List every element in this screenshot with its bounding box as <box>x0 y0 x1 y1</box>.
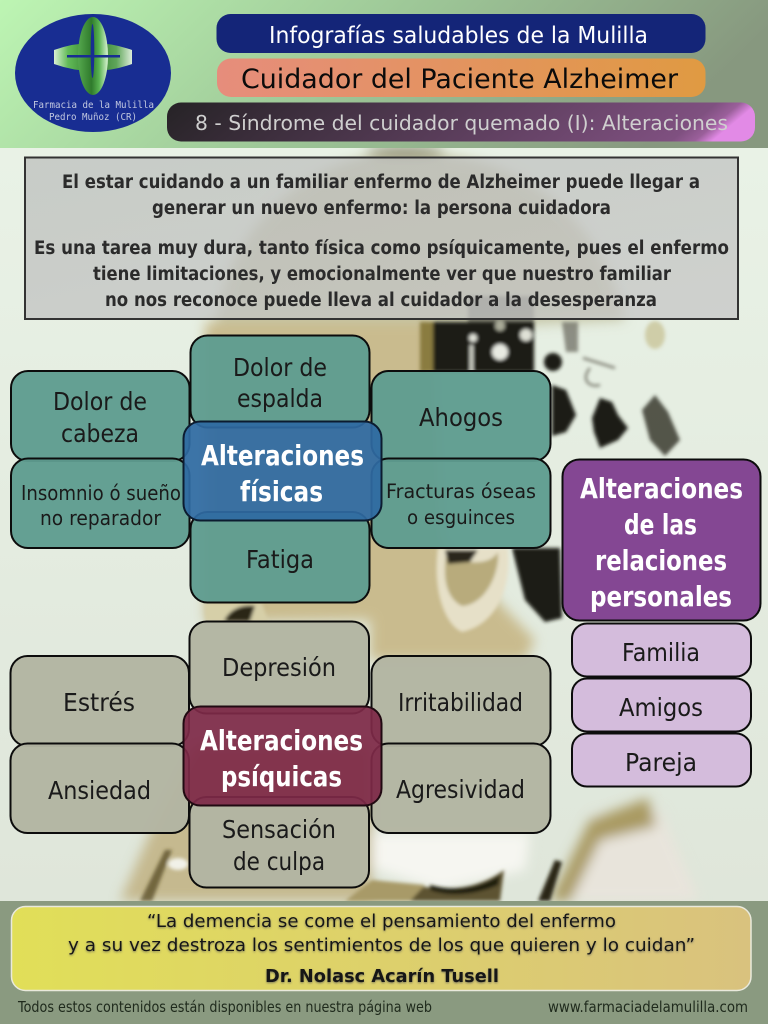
logo cross: green rings <box>54 17 132 95</box>
box: ansiedad <box>10 744 189 833</box>
center: alteraciones físicas: Alteraciones <box>201 439 364 472</box>
logo caption: Farmacia de la Mulilla <box>33 100 154 111</box>
header band <box>0 0 768 148</box>
box: dolor de espalda: Dolor de <box>233 353 327 382</box>
ear <box>437 548 509 632</box>
intro text panel: no nos reconoce puede lleva al cuidador a la desesperanza <box>105 290 657 311</box>
box: sensación de culpa <box>190 797 369 888</box>
box: irritabilidad: Irritabilidad <box>398 688 523 717</box>
top of skull <box>365 148 445 156</box>
intro text panel: tiene limitaciones, y emocionalmente ver que nuestro familiar <box>93 264 672 285</box>
hair <box>205 322 535 660</box>
header pill: series title <box>216 14 706 53</box>
box: insomnio <box>11 458 190 548</box>
box: dolor de espalda <box>190 336 370 428</box>
box: agresividad: Agresividad <box>396 775 525 804</box>
heading: relaciones personales: personales <box>590 580 732 613</box>
pale body right <box>570 810 700 901</box>
heading: relaciones personales: de las <box>624 508 697 541</box>
box: pareja <box>572 734 751 786</box>
center: alteraciones psíquicas: psíquicas <box>221 760 342 793</box>
box: insomnio: Insomnio ó sueño <box>21 481 181 505</box>
intro text panel: El estar cuidando a un familiar enfermo de Alzheimer puede llegar a <box>62 172 700 193</box>
center: alteraciones psíquicas <box>184 706 382 806</box>
dark hair and puzzle <box>432 322 534 372</box>
footer note: Todos estos contenidos están disponibles en nuestra página web <box>17 998 432 1016</box>
cluster: alteraciones físicas <box>11 336 550 602</box>
box: fatiga: Fatiga <box>246 545 314 574</box>
header pill: main title: Cuidador del Paciente Alzheimer <box>241 64 679 95</box>
box: fracturas: o esguinces <box>407 506 515 529</box>
box: dolor de cabeza: cabeza <box>61 419 139 448</box>
box: fatiga <box>190 512 370 602</box>
heading: relaciones personales: relaciones <box>595 544 727 577</box>
quote panel: y a su vez destroza los sentimientos de los que quieren y lo cuidan” <box>68 935 695 956</box>
bottom dark strokes <box>400 870 504 901</box>
left hair falling <box>120 745 372 901</box>
left neck mark <box>205 603 268 621</box>
collar <box>372 833 530 890</box>
intro text panel: generar un nuevo enfermo: la persona cuidadora <box>152 198 611 219</box>
center: alteraciones psíquicas: Alteraciones <box>200 724 363 757</box>
box: ahogos <box>372 371 550 461</box>
box: fracturas <box>372 458 550 548</box>
box: sensación de culpa: Sensación <box>222 815 336 844</box>
box: dolor de cabeza <box>11 371 190 461</box>
box: estrés <box>10 656 189 746</box>
black hair near ear <box>512 548 562 622</box>
box: agresividad <box>372 744 550 833</box>
box: depresión <box>190 622 369 714</box>
quote panel <box>12 906 751 990</box>
header pill: series title: Infografías saludables de la Mulilla <box>269 23 648 49</box>
box: familia: Familia <box>622 638 700 667</box>
box: ansiedad: Ansiedad <box>48 776 151 805</box>
logo caption <box>33 100 154 123</box>
box: irritabilidad <box>372 656 550 746</box>
box: dolor de espalda: espalda <box>237 384 323 413</box>
cluster: alteraciones psíquicas <box>10 622 550 888</box>
box: fracturas: Fracturas óseas <box>386 480 536 503</box>
skull <box>215 152 625 330</box>
box: dolor de cabeza: Dolor de <box>53 387 147 416</box>
footer website: www.farmaciadelamulilla.com <box>548 998 748 1016</box>
box: sensación de culpa: de culpa <box>233 847 325 876</box>
header pill: subtitle <box>167 102 755 142</box>
center: alteraciones físicas <box>184 422 382 520</box>
box: insomnio: no reparador <box>40 506 162 530</box>
footer band <box>0 901 768 1024</box>
box: pareja: Pareja <box>625 748 697 777</box>
center: alteraciones físicas: físicas <box>240 475 323 508</box>
intro text panel <box>25 158 738 319</box>
box: ahogos: Ahogos <box>419 403 503 432</box>
box: amigos <box>572 678 751 732</box>
logo: farmacia de la Mulilla <box>15 14 171 132</box>
background photo: elderly head with puzzle pieces <box>0 148 768 901</box>
logo caption: Pedro Muñoz (CR) <box>49 112 137 123</box>
box: familia <box>572 624 751 676</box>
header pill: subtitle: 8 - Síndrome del cuidador quemado (I): Alteraciones <box>195 111 728 135</box>
box: amigos: Amigos <box>619 693 703 722</box>
box: estrés: Estrés <box>63 688 135 717</box>
quote panel: “La demencia se come el pensamiento del enfermo <box>147 911 616 932</box>
box: depresión: Depresión <box>222 653 336 682</box>
quote panel: Dr. Nolasc Acarín Tusell <box>265 966 499 987</box>
cluster: alteraciones de las relaciones personales <box>562 460 760 786</box>
heading: relaciones personales <box>562 460 760 620</box>
